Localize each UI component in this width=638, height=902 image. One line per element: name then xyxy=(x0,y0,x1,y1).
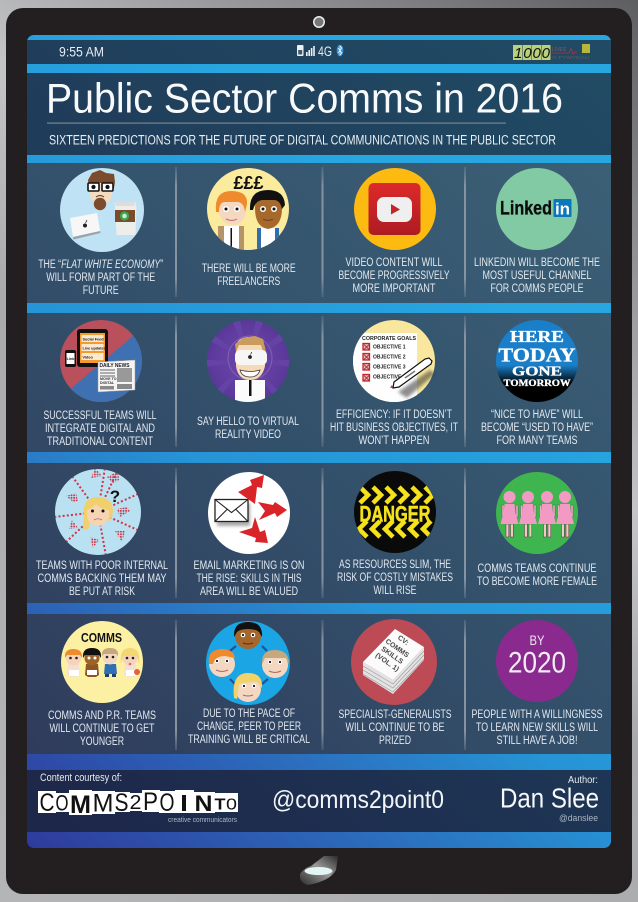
prediction 5 xyxy=(44,320,157,448)
logo: comms2point0: 2 xyxy=(130,792,142,814)
logo: comms2point0: T xyxy=(214,796,226,814)
caption: SPECIALIST-GENERALISTS xyxy=(338,709,452,721)
icon: corporate goals checklist: OBJECTIVE 1 xyxy=(373,344,406,350)
row panel 1 xyxy=(27,163,611,303)
caption: TO BECOME MORE FEMALE xyxy=(477,576,597,588)
icon: peer to peer training xyxy=(206,621,290,705)
icon: email marketing arrows xyxy=(208,472,290,554)
icon: digital and traditional: Live updates xyxy=(82,346,106,350)
logo: comms2point0: 0 xyxy=(226,796,237,814)
icon: video play button xyxy=(354,168,436,250)
icon: corporate goals checklist xyxy=(350,320,435,405)
caption: FREELANCERS xyxy=(217,276,280,288)
caption: LINKEDIN WILL BECOME THE xyxy=(474,257,600,269)
icon: camera xyxy=(313,16,325,28)
icon: by 2020 xyxy=(496,620,578,702)
caption: CHANGE, PEER TO PEER xyxy=(197,721,301,733)
caption: PRIZED xyxy=(379,735,411,747)
icon: young comms team: COMMS xyxy=(81,630,122,645)
logo: comms2point0: P xyxy=(143,788,158,816)
caption: MOST USEFUL CHANNEL xyxy=(482,270,592,282)
caption: TRADITIONAL CONTENT xyxy=(47,436,153,448)
prediction 6 xyxy=(197,320,299,441)
icon: danger: DANGER xyxy=(360,502,431,526)
icon: home button xyxy=(300,856,338,885)
caption: WILL FORM PART OF THE xyxy=(46,272,155,284)
caption: EFFICIENCY: IF IT DOESN’T xyxy=(336,409,452,421)
caption: TRAINING WILL BE CRITICAL xyxy=(188,734,310,746)
caption xyxy=(474,257,600,295)
caption: SUCCESSFUL TEAMS WILL xyxy=(44,410,157,422)
icon: here today gone tomorrow: TOMORROW xyxy=(504,379,571,389)
caption xyxy=(338,257,450,295)
prediction 11 xyxy=(337,471,453,597)
prediction 8 xyxy=(481,320,593,447)
caption: EMAIL MARKETING IS ON xyxy=(194,560,304,572)
caption: VIDEO CONTENT WILL xyxy=(346,257,443,269)
caption: THERE WILL BE MORE xyxy=(202,263,296,275)
icon: cv stack: (VOL. 1) xyxy=(374,652,400,673)
caption: WILL CONTINUE TO BE xyxy=(346,722,445,734)
caption: THE “FLAT WHITE ECONOMY” xyxy=(38,259,163,271)
footer: content courtesy: Content courtesy of: xyxy=(40,772,122,784)
caption: THE RISE: SKILLS IN THIS xyxy=(196,573,302,585)
caption xyxy=(38,259,163,297)
icon: digital and traditional xyxy=(60,320,142,402)
caption xyxy=(472,709,603,747)
caption xyxy=(338,709,452,747)
caption: FOR COMMS PEOPLE xyxy=(490,283,584,295)
row panel 2 xyxy=(27,313,611,452)
icon: by 2020: 2020 xyxy=(508,646,566,680)
status icons xyxy=(297,44,343,59)
icon: digital and traditional: Social Feed xyxy=(82,338,104,342)
caption: REALITY VIDEO xyxy=(215,429,281,441)
caption: YOUNGER xyxy=(80,736,124,748)
caption xyxy=(337,559,453,597)
caption xyxy=(202,263,296,288)
icon: here today gone tomorrow: TODAY xyxy=(498,344,576,366)
caption: FOR MANY TEAMS xyxy=(496,435,578,447)
prediction 7 xyxy=(330,320,458,447)
logo: 1000 lives: LIVES xyxy=(552,47,566,53)
caption: “NICE TO HAVE” WILL xyxy=(491,409,583,421)
icon: LinkedIn: in xyxy=(555,200,570,218)
icon: flat white economy xyxy=(60,168,144,252)
caption: AREA WILL BE VALUED xyxy=(200,586,298,598)
logo: comms2point0: M xyxy=(92,790,114,818)
caption: FUTURE xyxy=(83,285,119,297)
caption: COMMS BACKING THEM MAY xyxy=(38,573,167,585)
icon: corporate goals checklist: CORPORATE GOALS xyxy=(362,336,416,342)
caption: AS RESOURCES SLIM, THE xyxy=(339,559,451,571)
caption: HIT BUSINESS OBJECTIVES, IT xyxy=(330,422,458,434)
caption xyxy=(197,416,299,441)
caption xyxy=(188,708,310,746)
title: Public Sector Comms in 2016 xyxy=(46,74,563,122)
caption xyxy=(36,560,168,598)
status time: 9:55 AM xyxy=(59,44,104,60)
icon: LinkedIn xyxy=(496,168,578,250)
icon: LinkedIn: Linked xyxy=(500,198,552,220)
author name: Dan Slee xyxy=(500,782,599,814)
prediction 10 xyxy=(194,472,304,598)
icon: cv stack: SKILLS xyxy=(380,646,404,666)
icon: here today gone tomorrow xyxy=(496,320,578,402)
caption: RISK OF COSTLY MISTAKES xyxy=(337,572,453,584)
caption: INTEGRATE DIGITAL AND xyxy=(45,423,155,435)
caption: STILL HAVE A JOB! xyxy=(496,735,578,747)
logo: comms2point0 xyxy=(38,788,238,819)
icon: by 2020: BY xyxy=(530,632,545,648)
logo: comms2point0: N xyxy=(194,791,212,816)
prediction 3 xyxy=(338,168,450,295)
icon: four women xyxy=(496,472,578,554)
icon: corporate goals checklist: OBJECTIVE 2 xyxy=(373,354,406,360)
prediction 9 xyxy=(36,468,168,598)
caption: MORE IMPORTANT xyxy=(352,283,436,295)
logo: comms2point0: O xyxy=(160,789,174,817)
caption: SAY HELLO TO VIRTUAL xyxy=(197,416,299,428)
icon: freelancers: £££ xyxy=(234,173,264,193)
status icons: 4G xyxy=(318,44,332,59)
icon: corporate goals checklist: OBJECTIVE 3 xyxy=(373,364,406,370)
caption: COMMS AND P.R. TEAMS xyxy=(48,710,156,722)
prediction 14 xyxy=(188,621,310,746)
caption: DUE TO THE PACE OF xyxy=(203,708,295,720)
caption xyxy=(477,563,597,588)
logo: comms2point0: I xyxy=(178,790,190,816)
icon: digital and traditional: Link xyxy=(67,357,75,361)
icon: cv stack: CV: xyxy=(396,635,410,647)
icon: cv stack xyxy=(351,619,437,705)
logo: comms2point0: S xyxy=(114,789,128,817)
logo: comms2point0: M xyxy=(70,791,91,819)
title panel xyxy=(27,73,611,155)
footer panel xyxy=(27,770,611,832)
icon: here today gone tomorrow: GONE xyxy=(512,364,562,380)
caption: COMMS TEAMS CONTINUE xyxy=(478,563,597,575)
caption xyxy=(481,409,593,447)
icon: corporate goals checklist: OBJECTIVE xyxy=(373,374,402,380)
caption: PEOPLE WITH A WILLINGNESS xyxy=(472,709,603,721)
twitter handle: @comms2point0 xyxy=(272,786,444,814)
prediction 15 xyxy=(338,619,452,747)
icon: digital and traditional: Video xyxy=(82,356,93,360)
icon: virtual reality xyxy=(206,320,290,404)
icon: digital and traditional: DAILY NEWS xyxy=(100,363,130,369)
icon: digital and traditional: DIGITAL xyxy=(100,381,115,385)
caption: BE PUT AT RISK xyxy=(69,586,135,598)
icon: poor internal comms: ? xyxy=(110,487,120,506)
logo: 1000 lives: O FYWYDAU xyxy=(552,55,590,61)
prediction 12 xyxy=(477,472,597,588)
prediction 16 xyxy=(472,620,603,747)
row panel 3 xyxy=(27,463,611,603)
caption: BECOME PROGRESSIVELY xyxy=(338,270,450,282)
header panel xyxy=(27,40,611,64)
caption xyxy=(44,410,157,448)
prediction 1 xyxy=(38,168,163,297)
caption: TO LEARN NEW SKILLS WILL xyxy=(476,722,598,734)
tagline: creative communicators xyxy=(168,817,237,824)
icon: digital and traditional: MOVE TO xyxy=(100,377,117,381)
caption: WON’T HAPPEN xyxy=(358,435,430,447)
caption: WILL CONTINUE TO GET xyxy=(50,723,154,735)
prediction 2 xyxy=(202,168,296,288)
icon: cv stack: COMMS xyxy=(384,638,410,660)
logo: 1000 lives: 1000 xyxy=(514,45,551,62)
prediction 4 xyxy=(474,168,600,295)
caption: WILL RISE xyxy=(374,585,417,597)
author label: Author: xyxy=(568,775,598,786)
caption: TEAMS WITH POOR INTERNAL xyxy=(36,560,168,572)
caption xyxy=(194,560,304,598)
row panel 4 xyxy=(27,614,611,754)
logo: comms2point0: O xyxy=(56,790,68,816)
icon: here today gone tomorrow: HERE xyxy=(510,327,564,346)
caption xyxy=(330,409,458,447)
prediction 13 xyxy=(48,621,156,748)
logo: 1000 lives xyxy=(513,44,590,62)
caption: BECOME “USED TO HAVE” xyxy=(481,422,593,434)
author handle: @danslee xyxy=(559,813,598,823)
logo: comms2point0: C xyxy=(40,789,54,817)
caption xyxy=(48,710,156,748)
